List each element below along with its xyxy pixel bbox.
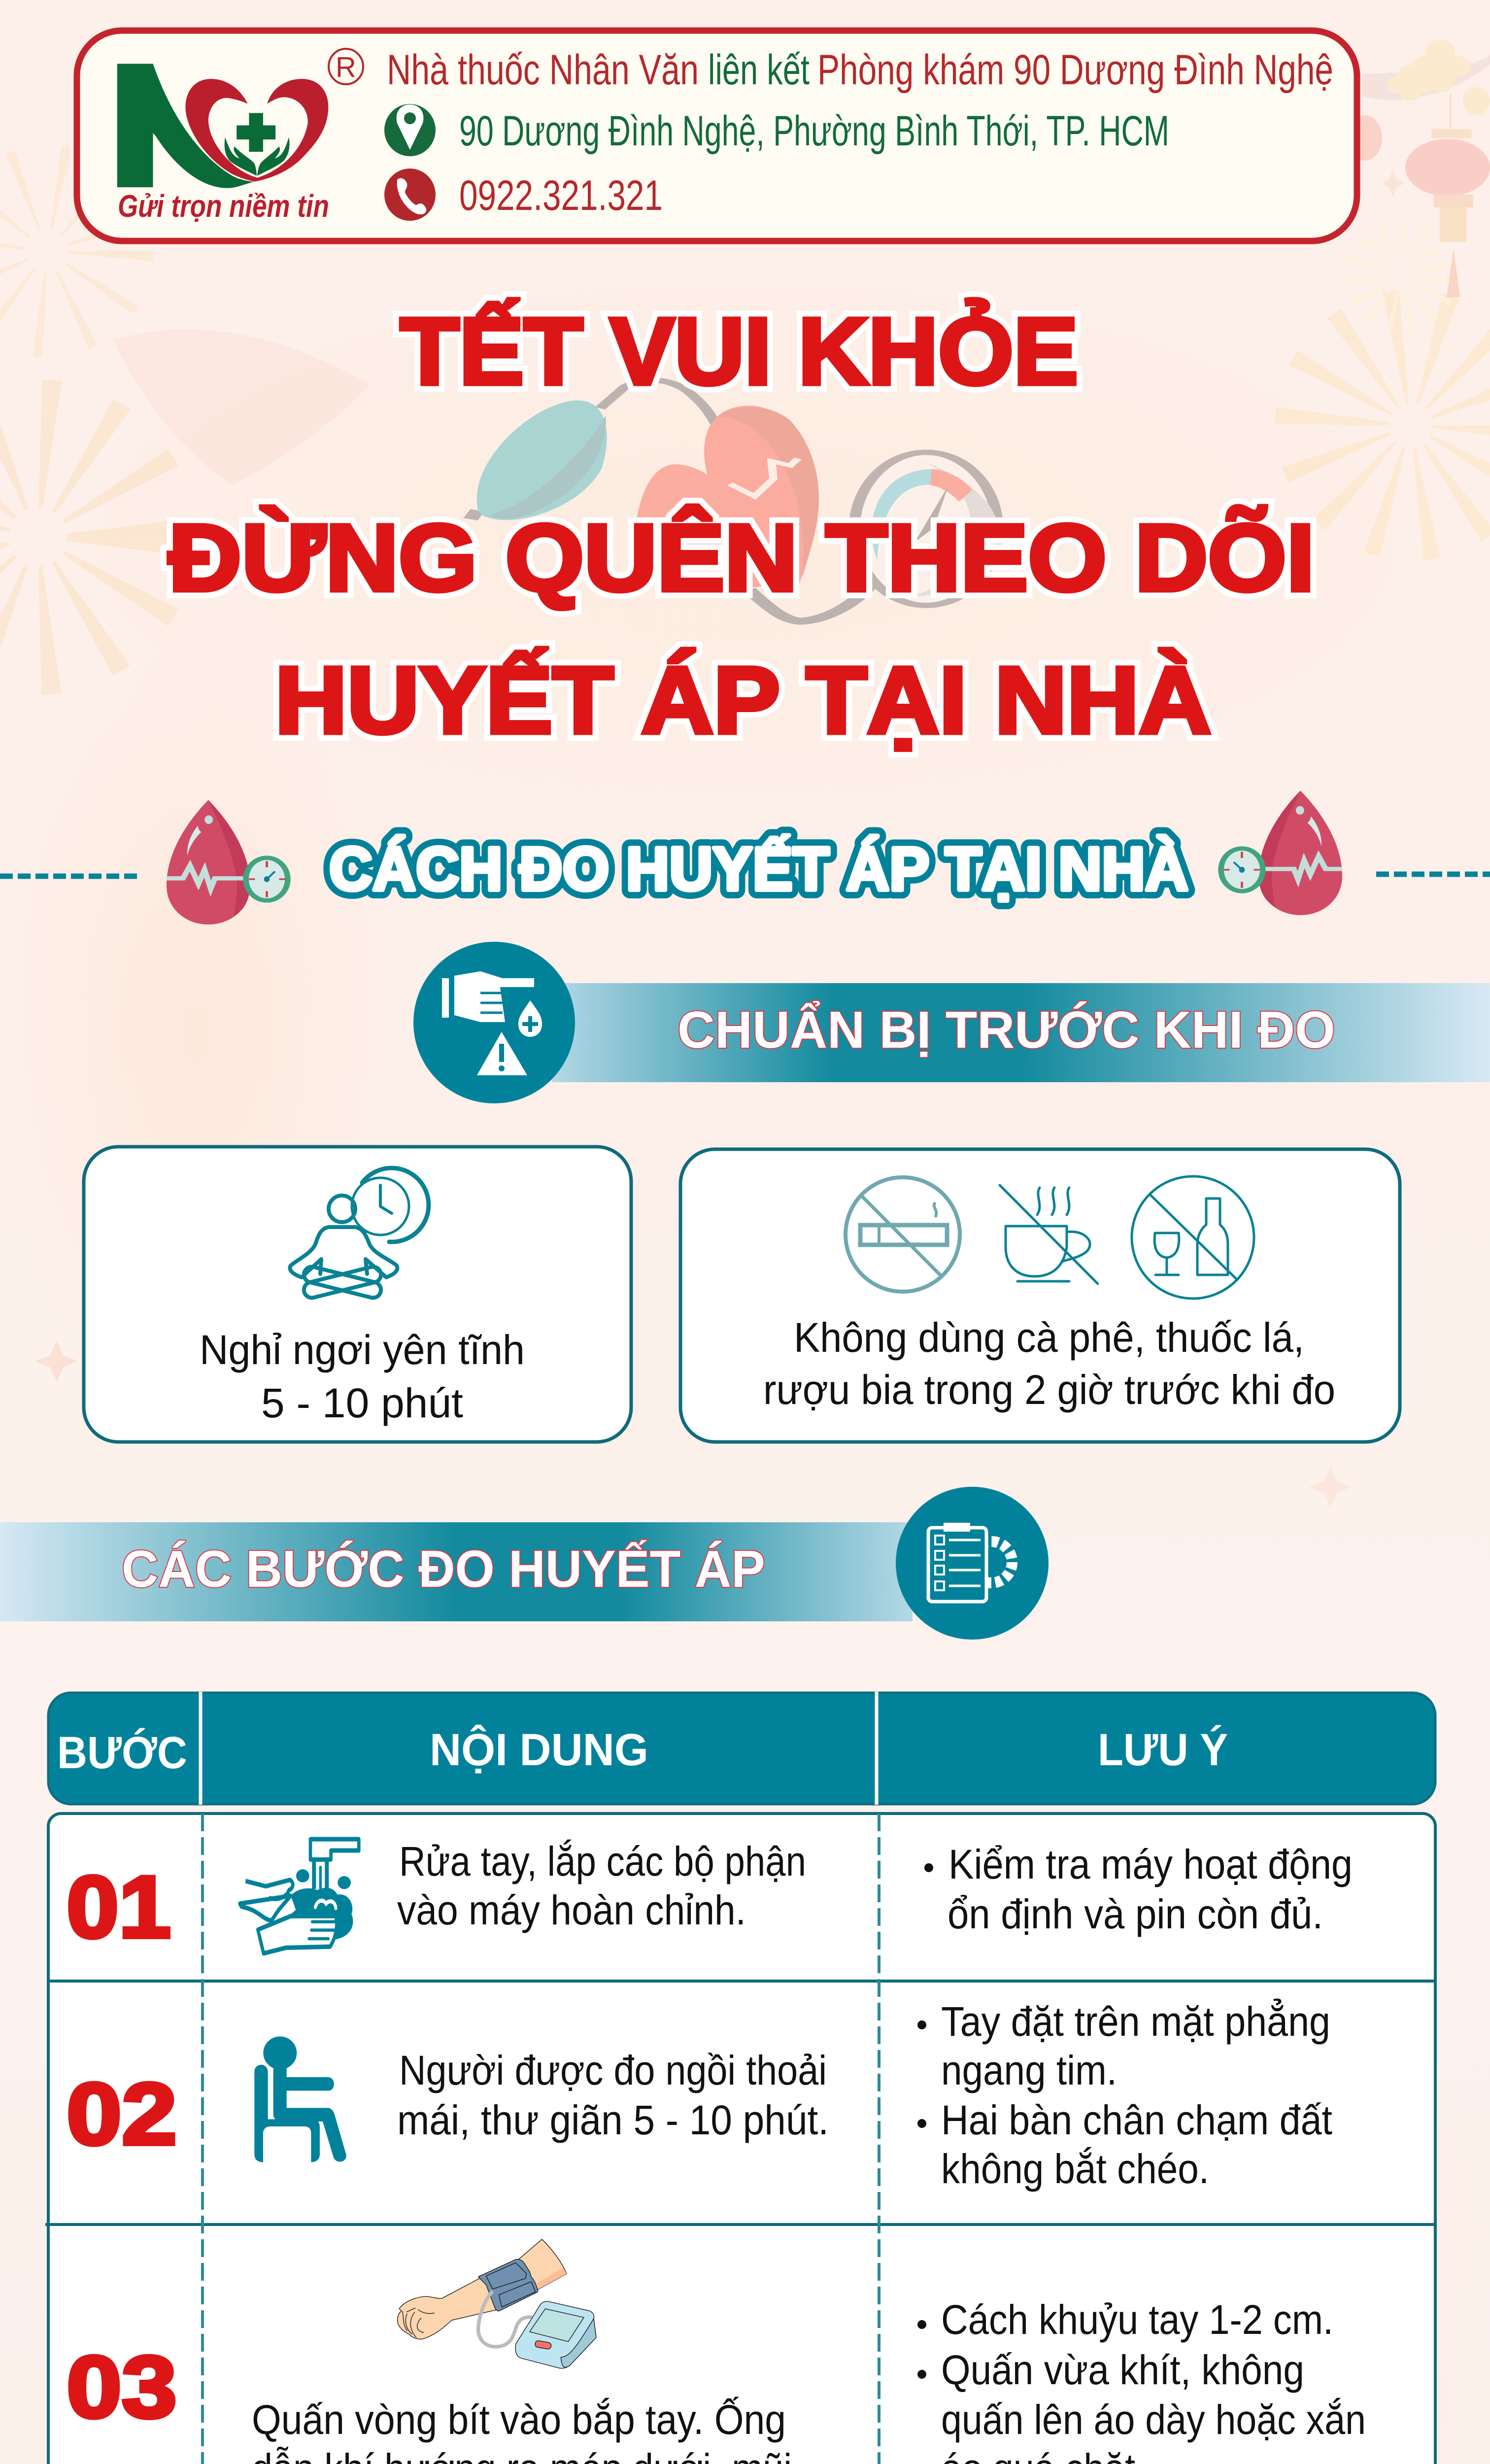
banner: preparation: [413, 942, 1490, 1103]
clinic name: [387, 46, 1333, 94]
card text: Nghỉ ngơi yên tĩnh: [200, 1327, 525, 1373]
card: rest before measuring: 5 - 10 phút: [261, 1380, 463, 1426]
icon: left blood drop with clock: [167, 800, 288, 924]
step 02 row: [67, 1998, 1332, 2192]
heading text: CÁCH ĐO HUYẾT ÁP TẠI NHÀ: [329, 835, 1188, 903]
step 02 row: Người được đo ngồi thoải: [399, 2047, 827, 2093]
step 01 row: ổn định và pin còn đủ.: [948, 1891, 1323, 1937]
main title: [169, 298, 1315, 753]
icon: hand with warning: [413, 942, 575, 1103]
logo slogan: Gửi trọn niềm tin: [118, 188, 329, 224]
table header: BƯỚC: [57, 1727, 187, 1778]
table header: [48, 1692, 1435, 1805]
hero illustration: blood pressure monitor and heart: [471, 380, 998, 621]
card: no coffee, tobacco, alcohol: [680, 1149, 1400, 1442]
table header: LƯU Ý: [1098, 1724, 1228, 1775]
icon: right blood drop with clock: [1221, 790, 1342, 915]
icon: checklist with gear: [896, 1487, 1049, 1640]
clinic name: liên kết: [708, 46, 810, 94]
step 02 row: Tay đặt trên mặt phẳng: [941, 1998, 1330, 2045]
logo registered mark: [329, 49, 363, 84]
heading text: CÁCH ĐO HUYẾT ÁP TẠI NHÀ: [329, 835, 1188, 903]
step 01 row: [67, 1838, 1353, 1956]
main title: ĐỪNG QUÊN THEO DÕI: [169, 505, 1315, 611]
step 01 row: 01: [67, 1858, 171, 1956]
banner text: CÁC BƯỚC ĐO HUYẾT ÁP: [122, 1540, 765, 1598]
section heading: how to measure: [0, 790, 1490, 924]
step 03 row: 03: [67, 2338, 177, 2436]
main title: ĐỪNG QUÊN THEO DÕI: [169, 505, 1315, 611]
step 01 row: Rửa tay, lắp các bộ phận: [399, 1838, 806, 1884]
card text: Không dùng cà phê, thuốc lá,: [794, 1314, 1304, 1361]
icon: no alcohol: [1132, 1176, 1254, 1299]
icon: seated person: [254, 2036, 346, 2162]
table body: [45, 1814, 1440, 2464]
icon: location pin: [384, 104, 436, 156]
main title: HUYẾT ÁP TẠI NHÀ: [275, 647, 1211, 753]
phone number: 0922.321.321: [459, 172, 663, 219]
icon: no smoking: [846, 1177, 960, 1292]
step 01 row: vào máy hoàn chỉnh.: [397, 1887, 746, 1933]
step 03 row: [67, 2239, 1366, 2464]
main title: TẾT VUI KHỎE: [400, 298, 1078, 404]
address: 90 Dương Đình Nghệ, Phường Bình Thới, TP. HCM: [459, 107, 1169, 155]
icon: phone: [384, 169, 436, 221]
step 02 row: mái, thư giãn 5 - 10 phút.: [397, 2097, 829, 2143]
step 03 row: quấn lên áo dày hoặc xắn: [941, 2396, 1366, 2443]
logo: [117, 64, 328, 188]
step 03 row: Quấn vừa khít, không: [941, 2347, 1304, 2393]
card: rest before measuring: [84, 1147, 631, 1442]
banner: measuring steps: [0, 1487, 1049, 1640]
header contact card: [77, 31, 1357, 241]
illustration: arm with blood pressure cuff and monitor: [398, 2239, 596, 2368]
step 02 row: Hai bàn chân chạm đất: [941, 2097, 1332, 2143]
clinic name: Phòng khám 90 Dương Đình Nghệ: [817, 46, 1333, 94]
step 02 row: không bắt chéo.: [941, 2146, 1209, 2192]
icon: hand washing: [240, 1839, 359, 1953]
card: no coffee, tobacco, alcohol: rượu bia trong 2 giờ trước khi đo: [763, 1367, 1335, 1413]
step 03 row: Quấn vòng bít vào bắp tay. Ống: [252, 2396, 786, 2443]
step 01 row: Kiểm tra máy hoạt động: [948, 1841, 1353, 1887]
logo registered mark: R: [336, 51, 356, 83]
main title: HUYẾT ÁP TẠI NHÀ: [275, 647, 1211, 753]
banner text: CHUẨN BỊ TRƯỚC KHI ĐO: [677, 1000, 1335, 1059]
icon: no coffee: [1000, 1185, 1098, 1284]
step 03 row: Cách khuỷu tay 1-2 cm.: [941, 2296, 1333, 2343]
main title: TẾT VUI KHỎE: [400, 298, 1078, 404]
clinic name: Nhà thuốc Nhân Văn: [387, 46, 699, 94]
table header: NỘI DUNG: [430, 1724, 648, 1775]
icon: meditating person with clock: [290, 1168, 429, 1300]
step 02 row: ngang tim.: [941, 2047, 1117, 2093]
step 02 row: 02: [67, 2065, 177, 2163]
